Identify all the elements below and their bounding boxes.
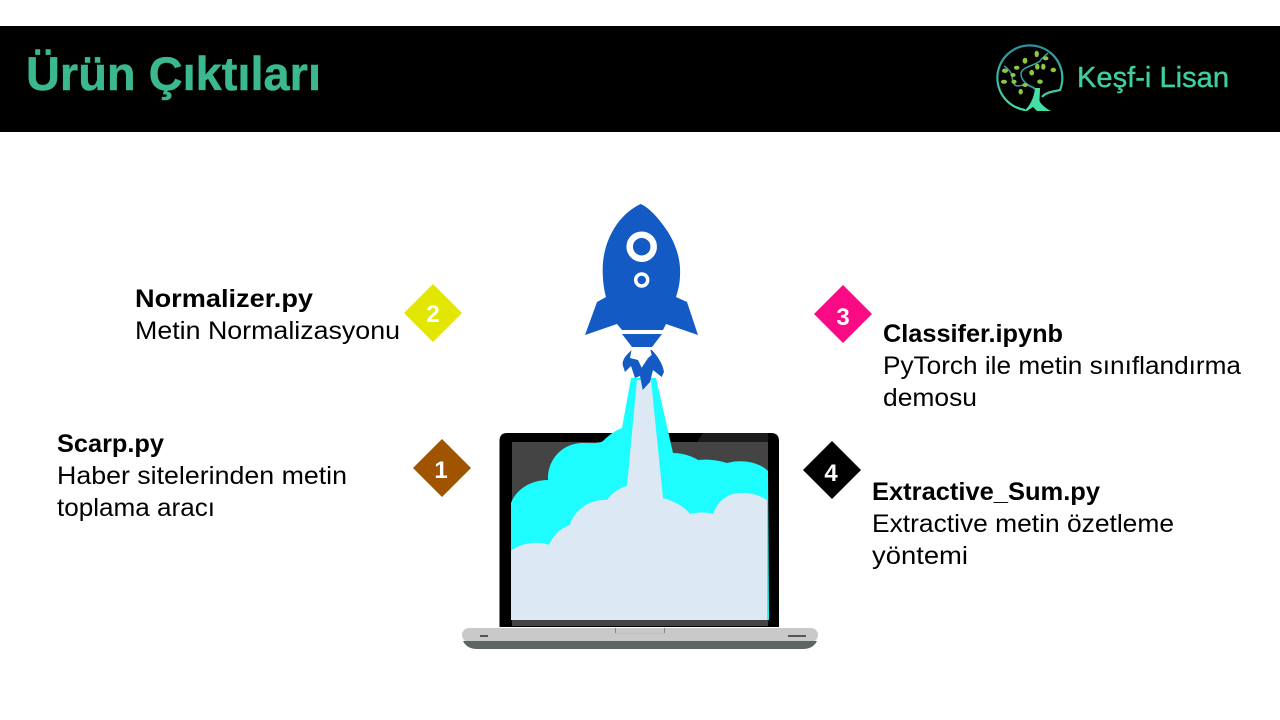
text: Normalizer.py: Metin Normalizasyonu <box>135 317 400 345</box>
text: Classifer.ipynb: PyTorch ile metin sınıflandırma <box>883 352 1241 380</box>
icon: diamond 3 <box>814 285 872 343</box>
text: Scarp.py <box>57 430 347 522</box>
text: Normalizer.py <box>135 285 400 345</box>
icon: diamond 2: 2 <box>426 301 440 328</box>
header bar <box>0 26 1280 132</box>
text: Classifer.ipynb <box>883 320 1241 412</box>
rocket flame <box>623 348 664 390</box>
text: Scarp.py: Scarp.py <box>57 430 164 458</box>
icon: diamond 4 <box>803 441 861 499</box>
rocket large window <box>630 235 654 259</box>
logo: Keşf-i Lisan <box>997 45 1229 111</box>
text: Scarp.py: toplama aracı <box>57 494 215 522</box>
title: Ürün Çıktıları <box>26 47 321 100</box>
text: Scarp.py: Haber sitelerinden metin <box>57 462 347 490</box>
laptop base <box>462 628 818 649</box>
text: Extractive_Sum.py: Extractive_Sum.py <box>872 478 1100 506</box>
icon: tree in circle <box>997 45 1062 111</box>
icon: diamond 1 <box>413 439 471 497</box>
icon: diamond 4: 4 <box>824 460 838 487</box>
rocket body and fins <box>585 204 698 335</box>
logo wordmark: Keşf-i Lisan <box>1077 62 1229 94</box>
text: Extractive_Sum.py <box>872 478 1174 570</box>
illustration: laptop <box>462 433 818 649</box>
icon: diamond 1: 1 <box>434 457 448 484</box>
laptop screen <box>512 442 768 626</box>
text: Classifer.ipynb: Classifer.ipynb <box>883 320 1063 348</box>
callout 1: Scarp.py <box>57 430 471 522</box>
callout 2: Normalizer.py <box>135 284 462 345</box>
exhaust: pale smoke cloud <box>511 380 767 620</box>
rocket small window <box>636 274 648 286</box>
icon: diamond 2 <box>404 284 462 342</box>
icon: diamond 3: 3 <box>836 304 850 331</box>
exhaust: cyan cloud <box>511 378 769 620</box>
laptop lid <box>500 433 779 627</box>
callout 4: Extractive_Sum.py <box>803 441 1174 570</box>
text: Extractive_Sum.py: yöntemi <box>872 542 968 570</box>
text: Classifer.ipynb: demosu <box>883 384 977 412</box>
rocket nozzle <box>622 334 662 347</box>
icon: rocket <box>585 204 698 390</box>
text: Normalizer.py: Normalizer.py <box>135 285 313 313</box>
text: Extractive_Sum.py: Extractive metin özetleme <box>872 510 1174 538</box>
callout 3: Classifer.ipynb <box>814 285 1241 412</box>
